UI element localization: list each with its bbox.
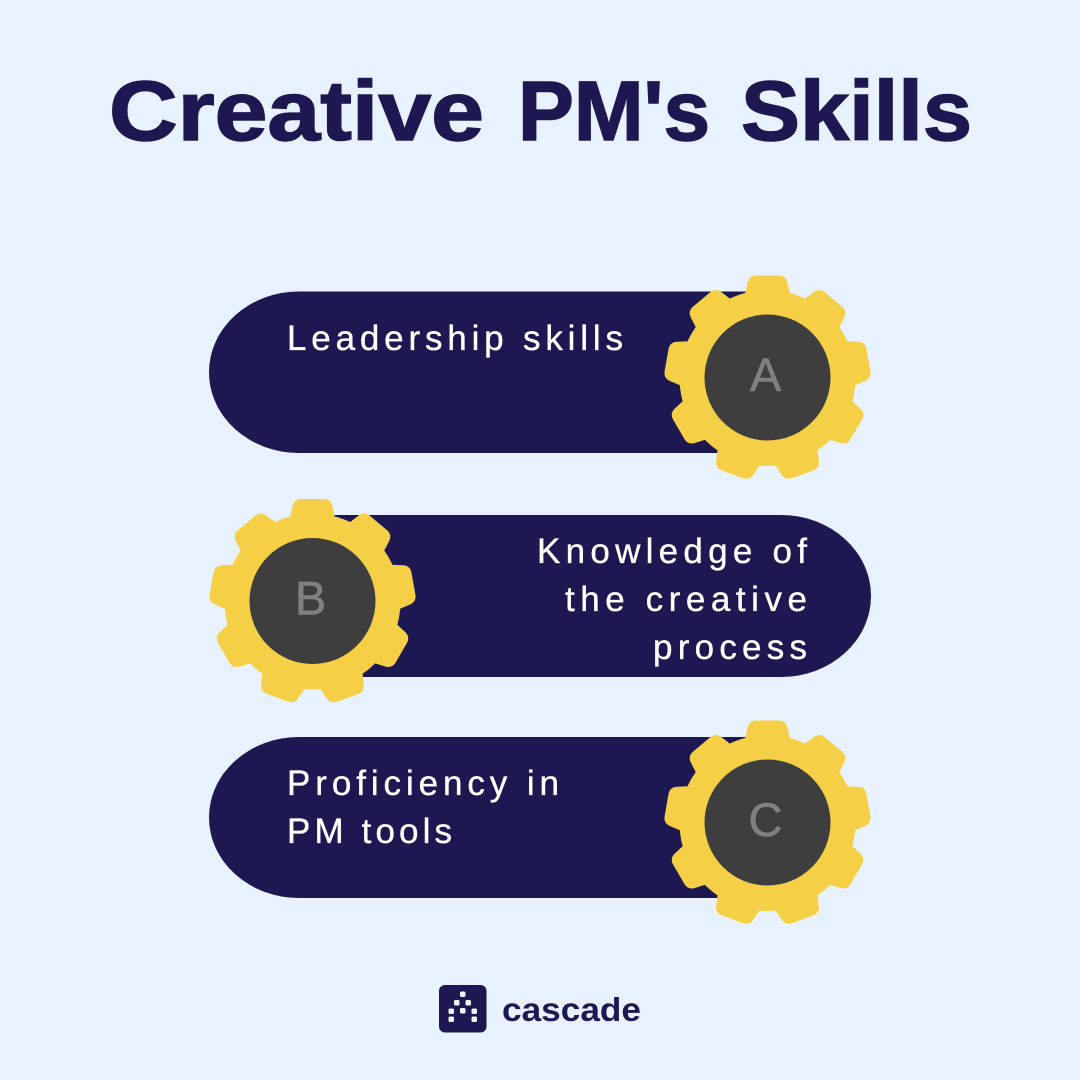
label: Proficiency in PM tools: Proficiency in [287, 764, 559, 803]
icon: gear A: A [750, 348, 782, 401]
label: Knowledge of the creative process: the creative [565, 580, 807, 619]
label: Proficiency in PM tools: PM tools [287, 812, 452, 851]
logo: cascade [439, 985, 641, 1032]
icon: cascade mark [439, 985, 486, 1032]
title [109, 64, 972, 158]
icon: gear B: B [295, 572, 326, 624]
wordmark: cascade [502, 991, 641, 1028]
title: Skills [741, 64, 972, 158]
icon: gear C [663, 720, 872, 927]
panel: skill A [209, 276, 872, 482]
pill B [313, 515, 871, 677]
icon: gear C: C [749, 793, 782, 846]
label: Proficiency in PM tools [287, 764, 559, 851]
pill A [209, 292, 767, 453]
label: Knowledge of the creative process [537, 532, 807, 667]
panel: skill C [209, 720, 872, 927]
label: Knowledge of the creative process: Knowledge of [537, 532, 807, 571]
title: Creative [109, 64, 484, 158]
panel: skill B [208, 499, 871, 706]
icon: gear B [208, 499, 417, 706]
label: Leadership skills: Leadership skills [287, 319, 623, 358]
title: PM's [518, 64, 710, 158]
icon: gear A [663, 276, 872, 482]
pill C [209, 737, 767, 898]
label: Knowledge of the creative process: process [653, 628, 807, 667]
